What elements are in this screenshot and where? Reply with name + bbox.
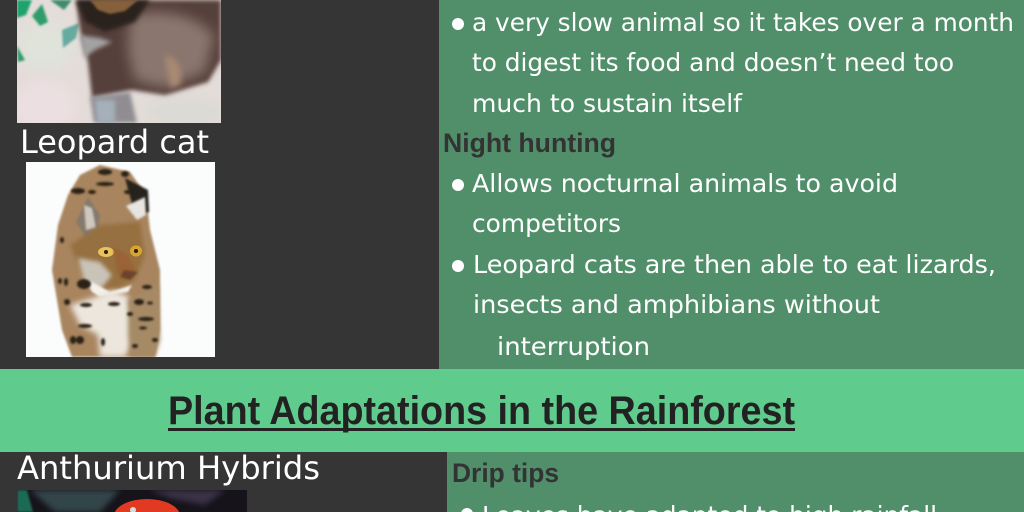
text: leopard cat diet bullet: interruption (497, 332, 650, 361)
text: sloth digestion bullet: a very slow animal so it takes over a month (472, 8, 1014, 37)
image: leopard cat photo (26, 162, 215, 357)
text: sloth digestion bullet: much to sustain itself (472, 89, 743, 118)
text: sloth digestion bullet (452, 8, 1014, 118)
text: leopard cat diet bullet (452, 250, 996, 361)
image: anthurium photo (17, 490, 247, 512)
text: nocturnal bullet (452, 169, 898, 238)
panel: animal adaptations text (439, 0, 1024, 369)
label: anthurium hybrids: Anthurium Hybrids (17, 449, 320, 487)
banner: plant adaptations (0, 369, 1024, 452)
label: leopard cat: Leopard cat (20, 123, 209, 161)
text: nocturnal bullet: competitors (472, 209, 621, 238)
image: sloth photo (13, 0, 225, 130)
text: nocturnal bullet: Allows nocturnal animals to avoid (472, 169, 898, 198)
heading: plant adaptations in the rainforest: Plant Adaptations in the Rainforest (168, 389, 795, 433)
heading: drip tips: Drip tips (452, 458, 559, 488)
text: sloth digestion bullet: to digest its food and doesn’t need too (472, 48, 954, 77)
panel: plant adaptations text (447, 452, 1024, 512)
text: leopard cat diet bullet: Leopard cats are then able to eat lizards, (473, 250, 996, 279)
heading: night hunting: Night hunting (443, 128, 616, 158)
text: leopard cat diet bullet: insects and amphibians without (473, 290, 880, 319)
